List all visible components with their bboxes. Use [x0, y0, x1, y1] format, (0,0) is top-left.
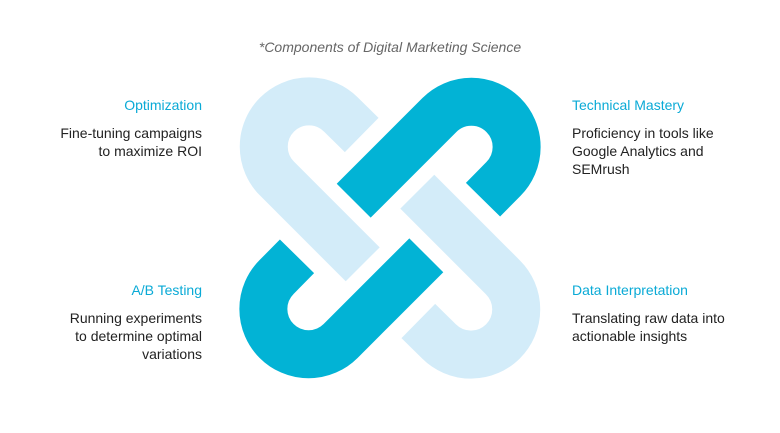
piece: light top-left — [264, 101, 363, 264]
text block: ab testing: A/B Testing — [131, 282, 202, 298]
text block: ab testing — [70, 282, 202, 362]
piece: dark bottom-left — [263, 255, 426, 354]
text block: optimization — [60, 97, 202, 159]
text block: technical mastery: Google Analytics and — [572, 143, 704, 159]
text block: data interpretation: Data Interpretation — [572, 282, 688, 298]
text block: technical mastery: Technical Mastery — [572, 97, 684, 113]
text block: ab testing: to determine optimal — [75, 328, 202, 344]
text block: optimization: Optimization — [124, 97, 202, 113]
text block: technical mastery: Proficiency in tools like — [572, 125, 714, 141]
title: *Components of Digital Marketing Science — [259, 39, 521, 55]
text block: optimization: Fine-tuning campaigns — [60, 125, 202, 141]
piece: light bottom-right — [417, 192, 516, 355]
text block: data interpretation: Translating raw data into — [572, 310, 725, 326]
text block: optimization: to maximize ROI — [99, 143, 202, 159]
text block: technical mastery: SEMrush — [572, 161, 630, 177]
text block: ab testing: Running experiments — [70, 310, 202, 326]
piece: dark top-right — [354, 102, 517, 201]
text block: data interpretation — [572, 282, 725, 344]
text block: technical mastery — [572, 97, 714, 177]
text block: data interpretation: actionable insights — [572, 328, 687, 344]
text block: ab testing: variations — [142, 346, 202, 362]
